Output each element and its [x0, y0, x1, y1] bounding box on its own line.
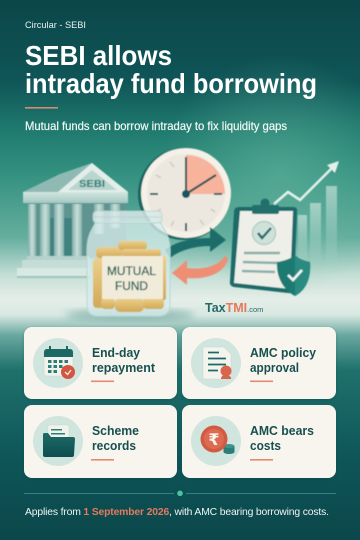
- subtitle: Mutual funds can borrow intraday to fix liquidity gaps: [25, 120, 287, 133]
- card text: approval: [250, 360, 299, 375]
- bank building: SEBI: [79, 178, 105, 190]
- card: AMC policy approval: [182, 327, 336, 399]
- title: SEBI allows: [25, 40, 172, 71]
- card: End-day repayment: [24, 327, 177, 399]
- title accent rule: [25, 107, 58, 109]
- brand logo: TaxTMI.com: [205, 301, 263, 315]
- card text: [92, 423, 139, 453]
- jar label: MUTUAL: [107, 265, 157, 278]
- card text: Scheme: [92, 423, 139, 438]
- card text: [250, 345, 317, 375]
- jar label: [107, 265, 157, 293]
- footer note: Applies from 1 September 2026, with AMC bearing borrowing costs.: [25, 507, 329, 518]
- icon: policy document: [203, 347, 232, 379]
- title: intraday fund borrowing: [25, 68, 317, 99]
- icon: rupee coin: ₹: [208, 430, 220, 449]
- arrows: borrow and repay: [165, 227, 228, 285]
- footer divider: [24, 490, 336, 496]
- clock: [138, 148, 231, 240]
- jar label: FUND: [115, 280, 148, 293]
- card: AMC bears costs: [182, 405, 336, 478]
- title: [25, 40, 317, 99]
- icon: folder: [43, 425, 75, 457]
- card text: records: [92, 438, 136, 453]
- icon: rupee coin: [200, 426, 234, 454]
- card text: repayment: [92, 360, 156, 375]
- shield: [277, 255, 310, 296]
- bank building: [17, 163, 128, 278]
- card: Scheme records: [24, 405, 177, 478]
- category label: Circular - SEBI: [25, 20, 86, 31]
- card text: [250, 423, 314, 453]
- card text: AMC bears: [250, 423, 314, 438]
- card text: AMC policy: [250, 345, 317, 360]
- clipboard: [230, 198, 297, 293]
- card text: End-day: [92, 345, 141, 360]
- jar of coins: [87, 211, 170, 316]
- card text: [92, 345, 156, 375]
- central illustration: [17, 148, 339, 321]
- icon: calendar: [44, 346, 75, 379]
- growth chart: [274, 161, 339, 266]
- card text: costs: [250, 438, 281, 453]
- floor shadow: [65, 309, 195, 321]
